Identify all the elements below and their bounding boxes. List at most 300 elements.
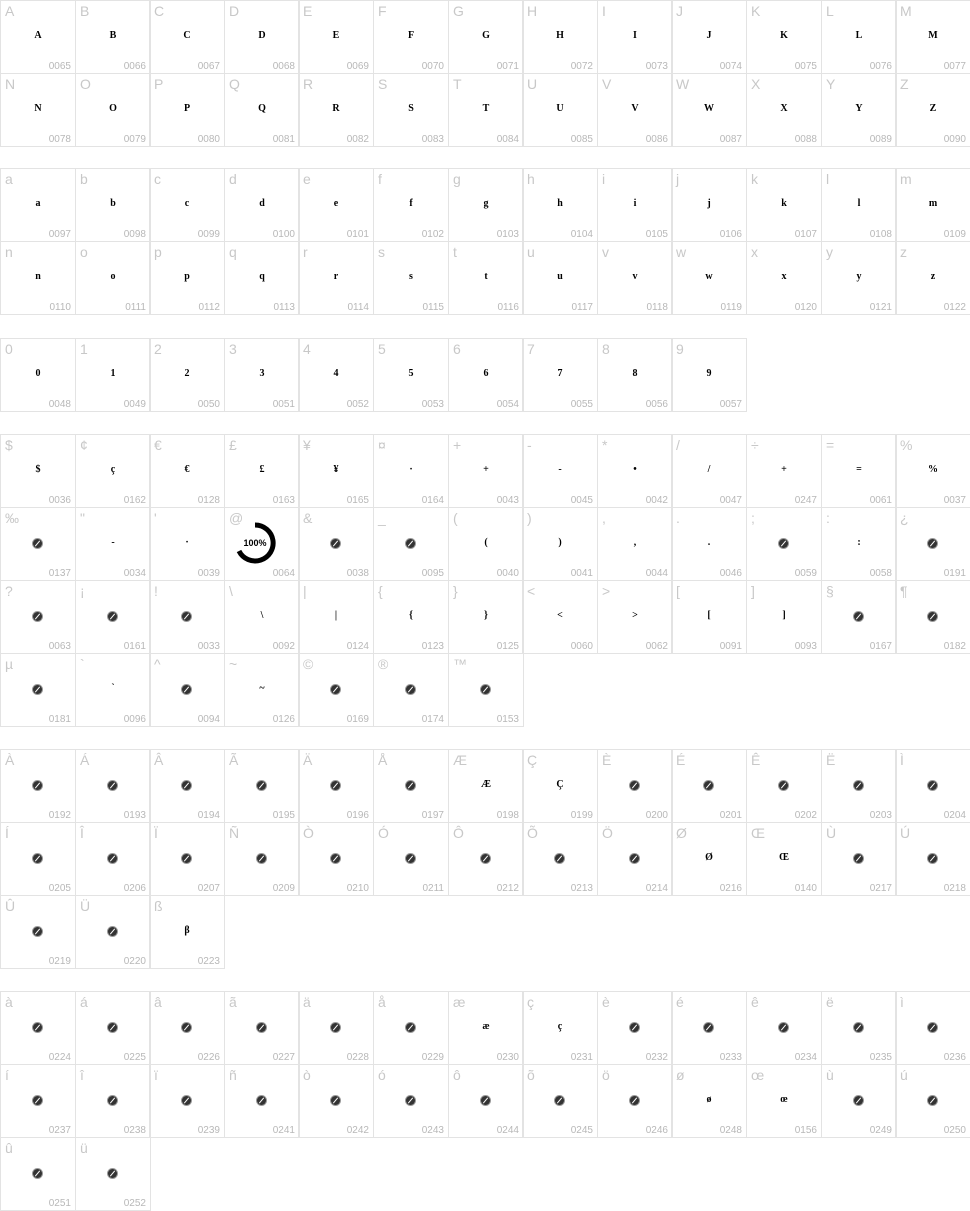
section: lowercase: i	[634, 198, 636, 209]
section: lowercase: y	[856, 271, 862, 282]
section: digits: 0	[5, 341, 13, 357]
section: accented lowercase: 0235	[870, 1052, 892, 1063]
section: digits: 6	[453, 341, 461, 357]
section: uppercase: U	[556, 103, 564, 114]
section: symbols: ·	[185, 537, 189, 548]
section: uppercase: X	[751, 76, 760, 92]
section: accented lowercase: 0236	[944, 1052, 966, 1063]
section: lowercase: r	[334, 271, 338, 282]
section: symbols: 0063	[49, 641, 71, 652]
section: accented lowercase: 0248	[720, 1125, 742, 1136]
section: symbols: 0064	[273, 568, 295, 579]
section: accented uppercase: ß	[154, 898, 163, 914]
section: accented uppercase: Á	[80, 752, 89, 768]
section: uppercase: M	[900, 3, 912, 19]
section: digits: 0055	[571, 399, 593, 410]
section: symbols: ~	[229, 656, 237, 672]
section: uppercase: J	[676, 3, 683, 19]
section: accented lowercase: ã	[229, 994, 237, 1010]
section: symbols: £	[229, 437, 237, 453]
section: accented lowercase: 0251	[49, 1198, 71, 1209]
section: accented uppercase: É	[676, 752, 685, 768]
section: uppercase: 0084	[497, 134, 519, 145]
section: digits: 0052	[347, 399, 369, 410]
section: lowercase: j	[676, 171, 679, 187]
section: accented uppercase: Ã	[229, 752, 238, 768]
section: accented uppercase: 0205	[49, 883, 71, 894]
section: lowercase: 0122	[944, 302, 966, 313]
section: symbols: `	[111, 683, 115, 694]
section: accented lowercase: ø	[706, 1094, 712, 1105]
section: digits: 5	[408, 368, 414, 379]
section: symbols: $	[36, 464, 40, 475]
section: accented lowercase: å	[378, 994, 386, 1010]
section: uppercase: K	[751, 3, 760, 19]
section: uppercase: W	[704, 103, 714, 114]
section: lowercase: 0108	[870, 229, 892, 240]
section: uppercase: O	[80, 76, 91, 92]
section: accented uppercase: 0196	[347, 810, 369, 821]
section: accented uppercase: Ö	[602, 825, 613, 841]
section: symbols: ‰	[5, 510, 19, 526]
section: uppercase: Z	[930, 103, 936, 114]
section: accented uppercase: Ø	[705, 852, 713, 863]
section: accented uppercase: 0203	[870, 810, 892, 821]
section: uppercase: R	[303, 76, 313, 92]
section: accented lowercase: 0233	[720, 1052, 742, 1063]
section: uppercase: 0070	[422, 61, 444, 72]
section: symbols: £	[260, 464, 264, 475]
section: uppercase: M	[928, 30, 938, 41]
section: lowercase: n	[35, 271, 41, 282]
section: lowercase: 0098	[124, 229, 146, 240]
section: digits: 6	[484, 368, 488, 379]
section: lowercase: 0118	[646, 302, 668, 313]
section: symbols: §	[826, 583, 834, 599]
section: lowercase: m	[900, 171, 912, 187]
section: uppercase: P	[184, 103, 190, 114]
section: accented lowercase: 0230	[497, 1052, 519, 1063]
section: symbols: [	[707, 610, 711, 621]
section: accented lowercase: é	[676, 994, 684, 1010]
section: lowercase: h	[557, 198, 563, 209]
section: lowercase: k	[781, 198, 787, 209]
section: uppercase: 0069	[347, 61, 369, 72]
section: uppercase: Y	[826, 76, 835, 92]
section: accented lowercase: 0156	[795, 1125, 817, 1136]
section: symbols: ¥	[334, 464, 338, 475]
section: lowercase	[0, 168, 970, 315]
section: symbols: 0042	[646, 495, 668, 506]
section: lowercase: 0104	[571, 229, 593, 240]
section: symbols: &	[303, 510, 312, 526]
section: symbols: 0060	[571, 641, 593, 652]
section: accented uppercase: À	[5, 752, 14, 768]
section: uppercase: 0082	[347, 134, 369, 145]
section: accented lowercase: ê	[751, 994, 759, 1010]
section: digits: 0051	[273, 399, 295, 410]
section: accented lowercase: æ	[482, 1021, 490, 1032]
section: lowercase: 0097	[49, 229, 71, 240]
section: lowercase: f	[409, 198, 413, 209]
section: symbols: >	[602, 583, 610, 599]
section: lowercase: p	[154, 244, 162, 260]
section: accented uppercase: Œ	[779, 852, 789, 863]
section: accented uppercase: Â	[154, 752, 163, 768]
section: lowercase: 0121	[870, 302, 892, 313]
section: accented uppercase: Ø	[676, 825, 687, 841]
section: accented lowercase: œ	[780, 1094, 788, 1105]
section: symbols: ©	[303, 656, 313, 672]
section: digits: 8	[632, 368, 638, 379]
section: symbols: )	[558, 537, 562, 548]
section: accented uppercase: 0213	[571, 883, 593, 894]
section: lowercase: 0114	[347, 302, 369, 313]
section: uppercase: D	[258, 30, 266, 41]
section: symbols: (	[453, 510, 458, 526]
section: accented lowercase: æ	[453, 994, 465, 1010]
section: digits: 0048	[49, 399, 71, 410]
section: uppercase: 0076	[870, 61, 892, 72]
section: symbols: 0181	[49, 714, 71, 725]
section: uppercase: L	[856, 30, 862, 41]
section: lowercase: q	[229, 244, 237, 260]
section: symbols: 0045	[571, 495, 593, 506]
section: symbols: 0093	[795, 641, 817, 652]
section: accented lowercase: û	[5, 1140, 13, 1156]
section: lowercase: u	[557, 271, 563, 282]
section: uppercase: 0085	[571, 134, 593, 145]
section: uppercase: 0077	[944, 61, 966, 72]
section: lowercase: m	[929, 198, 937, 209]
section: symbols: ¶	[900, 583, 908, 599]
section: symbols: 0191	[944, 568, 966, 579]
section: accented uppercase: Ç	[527, 752, 537, 768]
section: lowercase: s	[378, 244, 385, 260]
section: symbols: ¥	[303, 437, 311, 453]
section: uppercase: J	[706, 30, 712, 41]
section: accented uppercase: 0193	[124, 810, 146, 821]
section: symbols: 0128	[198, 495, 220, 506]
section: accented lowercase: 0226	[198, 1052, 220, 1063]
section: accented lowercase: 0232	[646, 1052, 668, 1063]
section: accented uppercase: Ù	[826, 825, 836, 841]
section: accented lowercase: ì	[900, 994, 904, 1010]
section: lowercase: 0120	[795, 302, 817, 313]
section: uppercase: B	[110, 30, 116, 41]
section: lowercase: a	[5, 171, 13, 187]
section: symbols: -	[527, 437, 532, 453]
section: digits: 7	[527, 341, 535, 357]
section: lowercase: 0099	[198, 229, 220, 240]
section: digits: 0054	[497, 399, 519, 410]
section: lowercase: 0107	[795, 229, 817, 240]
section: uppercase: F	[408, 30, 414, 41]
section: lowercase: t	[484, 271, 488, 282]
section: symbols: -	[558, 464, 562, 475]
section: lowercase: 0109	[944, 229, 966, 240]
section: accented uppercase: Ü	[80, 898, 90, 914]
section: symbols: ,	[602, 510, 606, 526]
section: accented uppercase: 0198	[497, 810, 519, 821]
section: symbols: 0174	[422, 714, 444, 725]
section: symbols: 0047	[720, 495, 742, 506]
section: accented uppercase: 0194	[198, 810, 220, 821]
section: accented uppercase: Ñ	[229, 825, 239, 841]
section: accented uppercase: 0197	[422, 810, 444, 821]
section: accented uppercase: Ò	[303, 825, 314, 841]
section: lowercase: 0111	[125, 302, 146, 313]
section: symbols: 0039	[198, 568, 220, 579]
section: uppercase: 0089	[870, 134, 892, 145]
section: symbols: 0041	[571, 568, 593, 579]
section: accented lowercase: î	[80, 1067, 84, 1083]
section: symbols: '	[154, 510, 157, 526]
section: accented uppercase: Æ	[481, 779, 491, 790]
section: symbols: 0153	[497, 714, 519, 725]
section: accented lowercase: 0225	[124, 1052, 146, 1063]
section: accented lowercase	[0, 991, 970, 1211]
section: symbols: 0040	[497, 568, 519, 579]
section: uppercase: P	[154, 76, 163, 92]
section: uppercase: 0081	[273, 134, 295, 145]
section: lowercase: g	[484, 198, 488, 209]
section: accented lowercase: ç	[558, 1021, 562, 1032]
section: accented uppercase: 0218	[944, 883, 966, 894]
section: lowercase: x	[782, 271, 786, 282]
section: lowercase: v	[602, 244, 609, 260]
section: lowercase: j	[707, 198, 711, 209]
section: symbols: :	[826, 510, 830, 526]
section: symbols: ®	[378, 656, 388, 672]
section: uppercase: 0072	[571, 61, 593, 72]
section: uppercase: 0067	[198, 61, 220, 72]
section: symbols: !	[154, 583, 158, 599]
section: symbols: 0036	[49, 495, 71, 506]
section: accented lowercase: ü	[80, 1140, 88, 1156]
section: accented lowercase: 0239	[198, 1125, 220, 1136]
section: symbols: =	[826, 437, 834, 453]
section: uppercase: Q	[258, 103, 266, 114]
section: accented uppercase: Ú	[900, 825, 910, 841]
section: uppercase: 0071	[497, 61, 519, 72]
section: accented uppercase: Å	[378, 752, 387, 768]
section: accented lowercase: á	[80, 994, 88, 1010]
section: lowercase: c	[154, 171, 161, 187]
section: uppercase: C	[154, 3, 164, 19]
icon: 100% ring	[236, 522, 276, 564]
section: uppercase: 0087	[720, 134, 742, 145]
section: uppercase: H	[556, 30, 564, 41]
section: accented uppercase: 0219	[49, 956, 71, 967]
section: accented uppercase: Ô	[453, 825, 464, 841]
section: accented uppercase: Œ	[751, 825, 765, 841]
section: digits: 2	[154, 341, 162, 357]
section: accented uppercase: Ä	[303, 752, 312, 768]
section: digits	[0, 338, 747, 412]
section: symbols: 0059	[795, 568, 817, 579]
section: uppercase: L	[826, 3, 834, 19]
section: symbols: -	[111, 537, 115, 548]
section: accented uppercase: 0199	[571, 810, 593, 821]
section: uppercase: D	[229, 3, 239, 19]
section: accented lowercase: 0229	[422, 1052, 444, 1063]
section: symbols: /	[676, 437, 680, 453]
section: lowercase: y	[826, 244, 833, 260]
section: lowercase: 0110	[49, 302, 71, 313]
section: digits: 3	[260, 368, 264, 379]
section: uppercase: 0074	[720, 61, 742, 72]
section: symbols	[0, 434, 970, 727]
section: digits: 9	[706, 368, 712, 379]
section: digits: 7	[558, 368, 562, 379]
section: uppercase: K	[780, 30, 788, 41]
section: accented uppercase: 0211	[422, 883, 444, 894]
section: accented uppercase: Í	[5, 825, 9, 841]
section: symbols: ¢	[80, 437, 88, 453]
section: symbols: "	[80, 510, 85, 526]
section: digits: 0050	[198, 399, 220, 410]
section: uppercase: U	[527, 76, 537, 92]
section: digits: 5	[378, 341, 386, 357]
section: accented lowercase: 0224	[49, 1052, 71, 1063]
section: symbols: 0094	[198, 714, 220, 725]
section: accented uppercase: Ë	[826, 752, 835, 768]
section: lowercase: 0117	[571, 302, 593, 313]
section: accented lowercase: ú	[900, 1067, 908, 1083]
section: accented uppercase: Ó	[378, 825, 389, 841]
section: accented uppercase: Õ	[527, 825, 538, 841]
section: accented uppercase: 0212	[497, 883, 519, 894]
section: symbols: =	[856, 464, 862, 475]
section: lowercase: o	[110, 271, 116, 282]
section: symbols: µ	[5, 656, 13, 672]
section: uppercase: R	[332, 103, 340, 114]
section: symbols: 0095	[422, 568, 444, 579]
section: symbols: :	[857, 537, 861, 548]
section: symbols: 0124	[347, 641, 369, 652]
section: lowercase: k	[751, 171, 758, 187]
section: symbols: .	[676, 510, 680, 526]
section: accented uppercase: 0140	[795, 883, 817, 894]
section: accented lowercase: 0242	[347, 1125, 369, 1136]
section: accented lowercase: 0227	[273, 1052, 295, 1063]
section: accented uppercase: È	[602, 752, 611, 768]
section: uppercase: C	[183, 30, 191, 41]
section: uppercase: B	[80, 3, 89, 19]
section: uppercase: 0090	[944, 134, 966, 145]
section: uppercase: Y	[855, 103, 863, 114]
section: lowercase: g	[453, 171, 461, 187]
section: symbols: |	[303, 583, 307, 599]
section: lowercase: b	[80, 171, 88, 187]
section: symbols: 0044	[646, 568, 668, 579]
section: symbols: 0161	[124, 641, 146, 652]
section: accented lowercase: ó	[378, 1067, 386, 1083]
section: accented uppercase: Æ	[453, 752, 467, 768]
section: accented lowercase: 0237	[49, 1125, 71, 1136]
section: lowercase: q	[259, 271, 265, 282]
section: symbols: 0058	[870, 568, 892, 579]
section: accented uppercase: 0216	[720, 883, 742, 894]
section: symbols: %	[900, 437, 912, 453]
section: lowercase: w	[705, 271, 713, 282]
section: uppercase: F	[378, 3, 387, 19]
section: symbols: +	[483, 464, 489, 475]
section: uppercase: Z	[900, 76, 909, 92]
section: lowercase: a	[36, 198, 40, 209]
section: uppercase: N	[34, 103, 42, 114]
section: lowercase: o	[80, 244, 88, 260]
section: uppercase: S	[378, 76, 387, 92]
section: lowercase: 0103	[497, 229, 519, 240]
section: lowercase: 0105	[646, 229, 668, 240]
section: lowercase: f	[378, 171, 382, 187]
section: symbols: \	[229, 583, 233, 599]
section: uppercase: N	[5, 76, 15, 92]
section: accented uppercase: 0223	[198, 956, 220, 967]
section: symbols: ^	[154, 656, 161, 672]
section: symbols: 0165	[347, 495, 369, 506]
section: symbols: ¤	[378, 437, 386, 453]
section: lowercase: z	[931, 271, 935, 282]
section: symbols: 0169	[347, 714, 369, 725]
section: symbols: ¿	[900, 510, 909, 526]
section: accented lowercase: õ	[527, 1067, 535, 1083]
section: lowercase: 0113	[273, 302, 295, 313]
section: lowercase: t	[453, 244, 457, 260]
section: symbols: 0164	[422, 495, 444, 506]
section: lowercase: 0116	[497, 302, 519, 313]
section: symbols: }	[484, 610, 488, 621]
section: uppercase: V	[631, 103, 639, 114]
section: accented uppercase: 0207	[198, 883, 220, 894]
section: symbols: 0163	[273, 495, 295, 506]
section: lowercase: h	[527, 171, 535, 187]
section: accented uppercase: 0201	[720, 810, 742, 821]
section: accented lowercase: í	[5, 1067, 9, 1083]
section: uppercase: V	[602, 76, 611, 92]
section: accented uppercase: Î	[80, 825, 84, 841]
section: symbols: )	[527, 510, 532, 526]
section: accented lowercase: œ	[751, 1067, 764, 1083]
section: accented lowercase: ô	[453, 1067, 461, 1083]
section: uppercase: 0086	[646, 134, 668, 145]
section: symbols: `	[80, 656, 85, 672]
section: uppercase: I	[602, 3, 606, 19]
section: accented lowercase: 0250	[944, 1125, 966, 1136]
section: symbols: ]	[751, 583, 755, 599]
section: lowercase: r	[303, 244, 308, 260]
section: lowercase: 0102	[422, 229, 444, 240]
section: symbols: 0162	[124, 495, 146, 506]
section: uppercase: H	[527, 3, 537, 19]
section: lowercase: w	[676, 244, 686, 260]
section: symbols: 0038	[347, 568, 369, 579]
section: uppercase: 0083	[422, 134, 444, 145]
section: lowercase: z	[900, 244, 907, 260]
section: symbols: ¡	[80, 583, 85, 599]
section: lowercase: x	[751, 244, 758, 260]
section: uppercase: Q	[229, 76, 240, 92]
section: symbols: .	[708, 537, 710, 548]
section: accented uppercase: Ê	[751, 752, 760, 768]
section: symbols: 0125	[497, 641, 519, 652]
section: symbols: (	[484, 537, 488, 548]
section: uppercase: A	[34, 30, 42, 41]
section: lowercase: 0106	[720, 229, 742, 240]
section: symbols: <	[557, 610, 563, 621]
